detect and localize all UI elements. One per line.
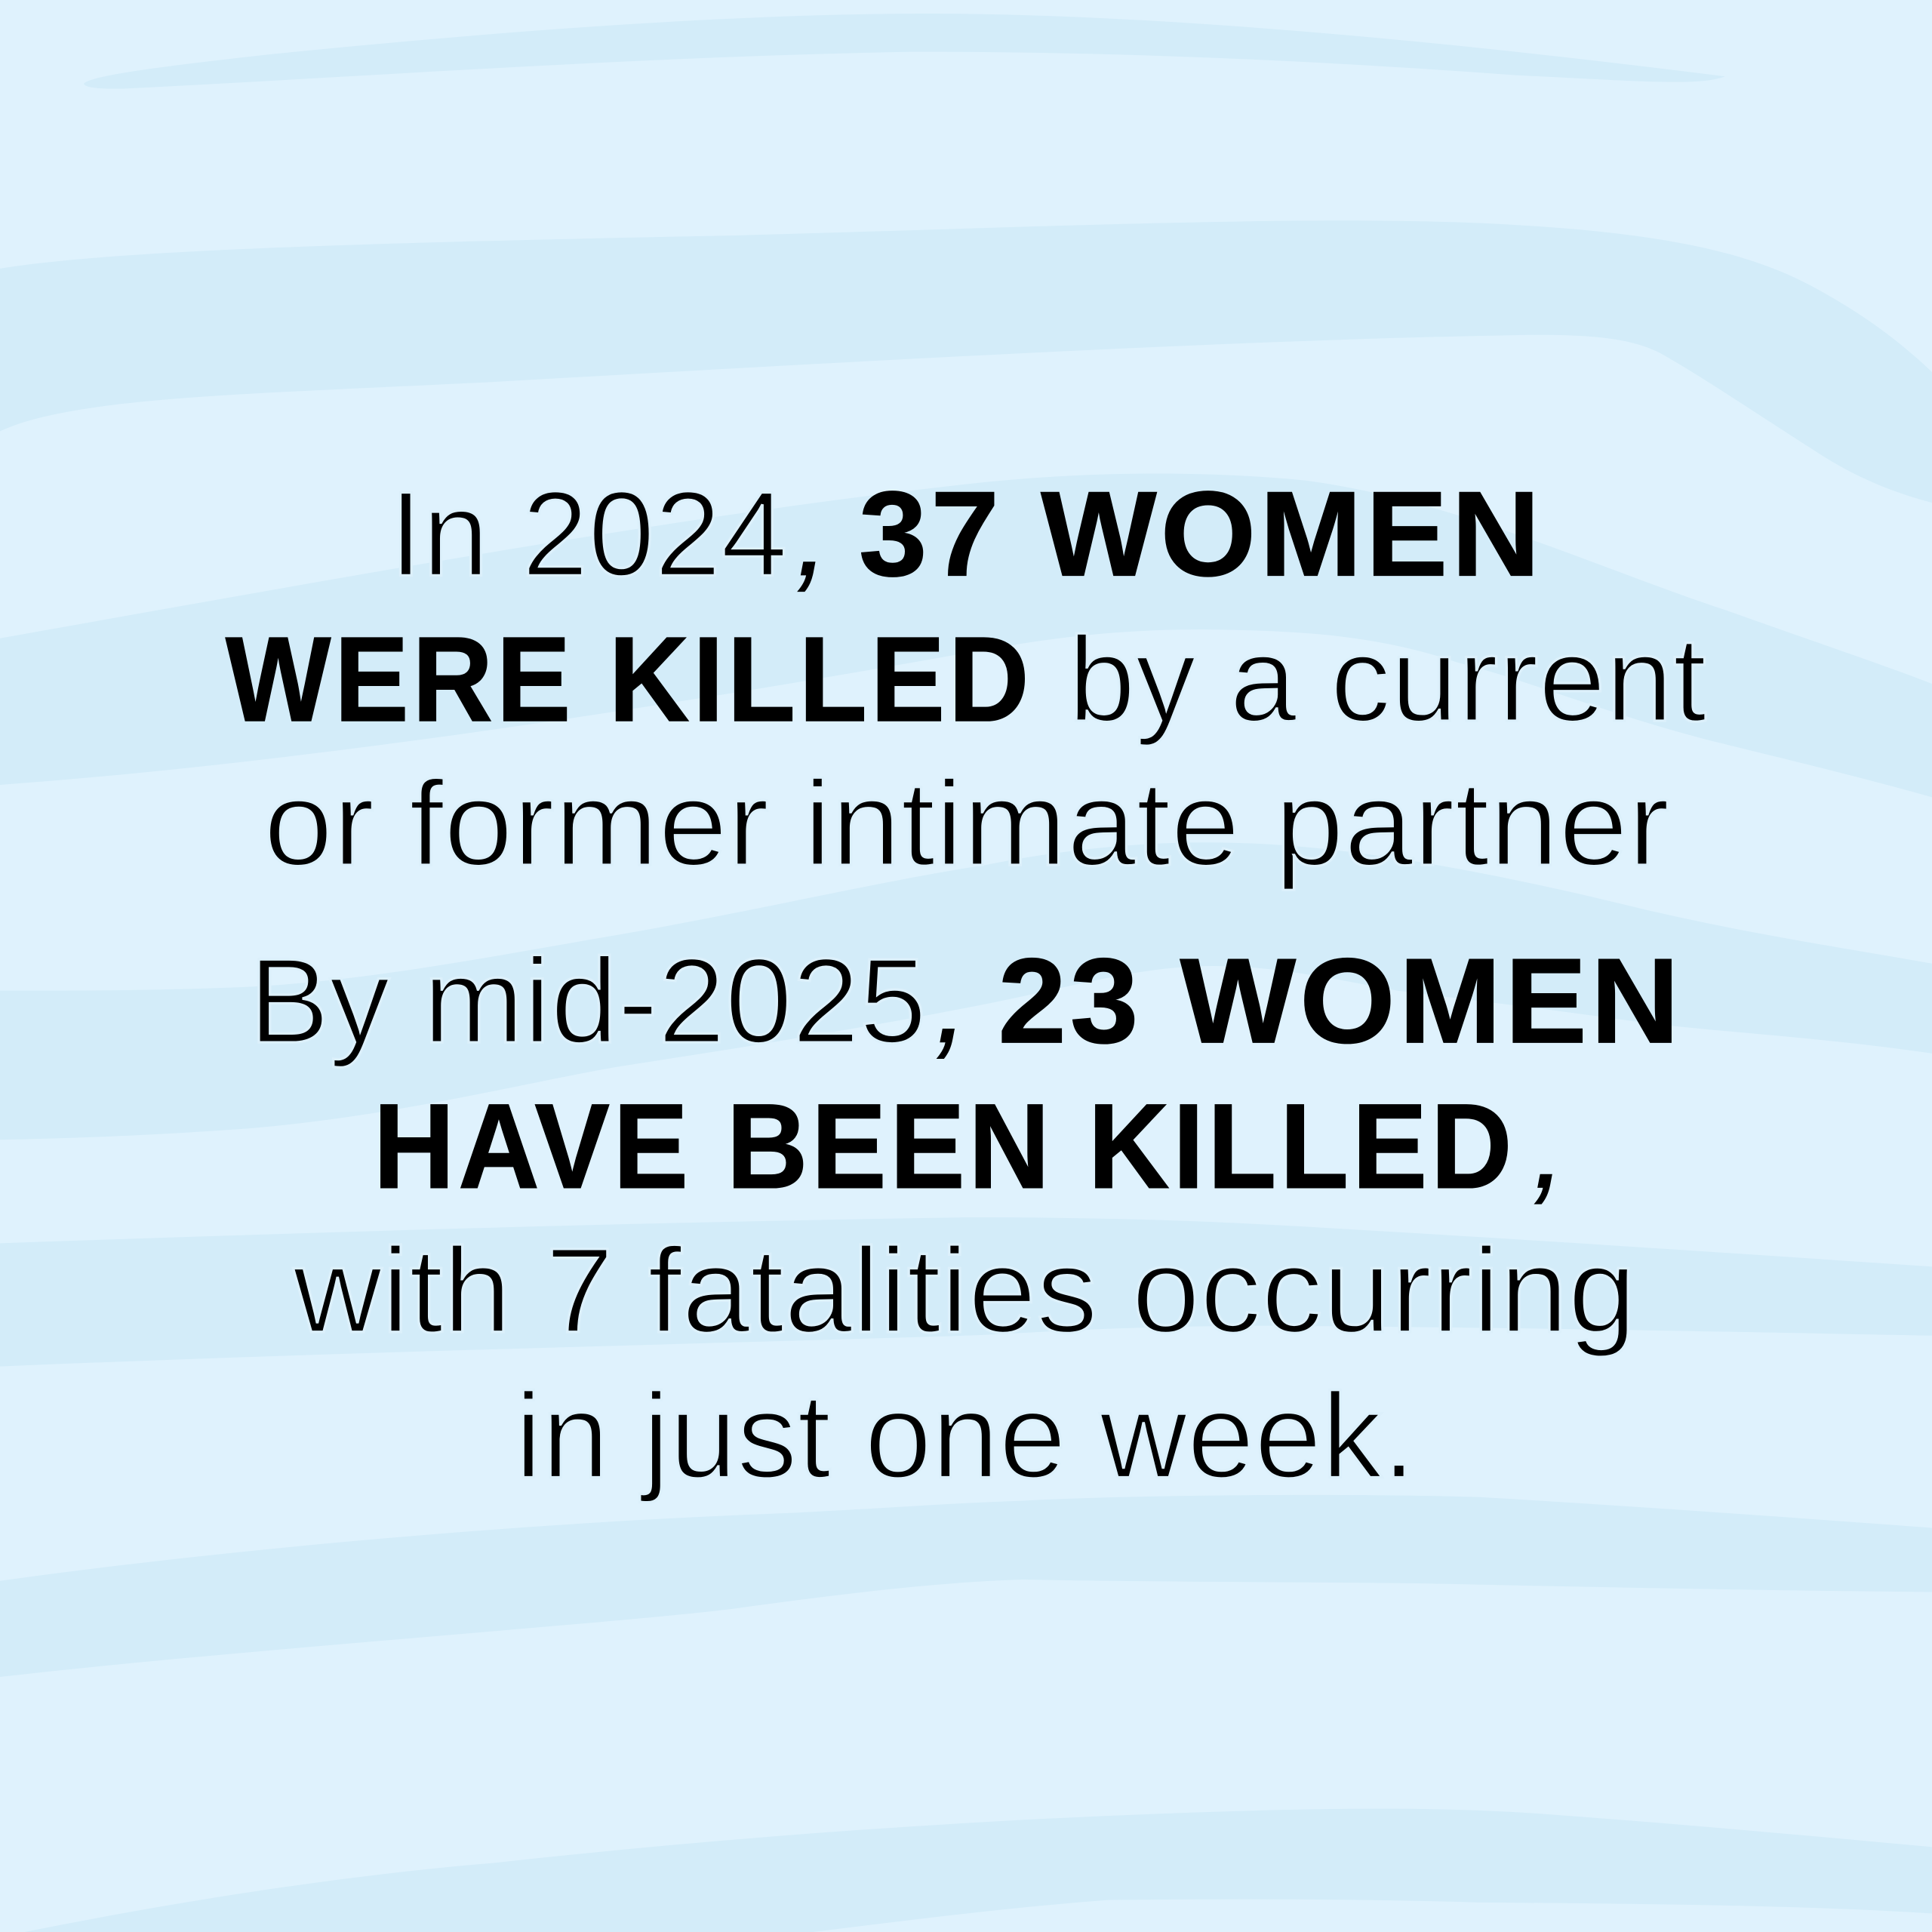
line 2: WERE KILLED — [226, 611, 1032, 746]
line 4: By mid-2025 — [249, 933, 927, 1068]
line 1 — [389, 459, 1544, 602]
line 5: HAVE BEEN KILLED — [374, 1078, 1515, 1214]
line 4 — [249, 926, 1683, 1069]
line 5: , — [1531, 1072, 1567, 1215]
statement text — [226, 459, 1706, 1503]
line 1: In 2024 — [389, 466, 787, 601]
line 4: 23 WOMEN — [998, 933, 1683, 1068]
line 3: or former intimate partner — [263, 755, 1669, 891]
line 2 — [226, 611, 1706, 746]
line 4: , — [934, 926, 970, 1069]
line 2: by a current — [1069, 611, 1706, 746]
line 1: 37 WOMEN — [859, 466, 1544, 601]
line 6: with 7 fatalities occurring — [293, 1223, 1636, 1358]
line 1: , — [795, 459, 830, 602]
line 7: in just one week. — [515, 1368, 1416, 1503]
